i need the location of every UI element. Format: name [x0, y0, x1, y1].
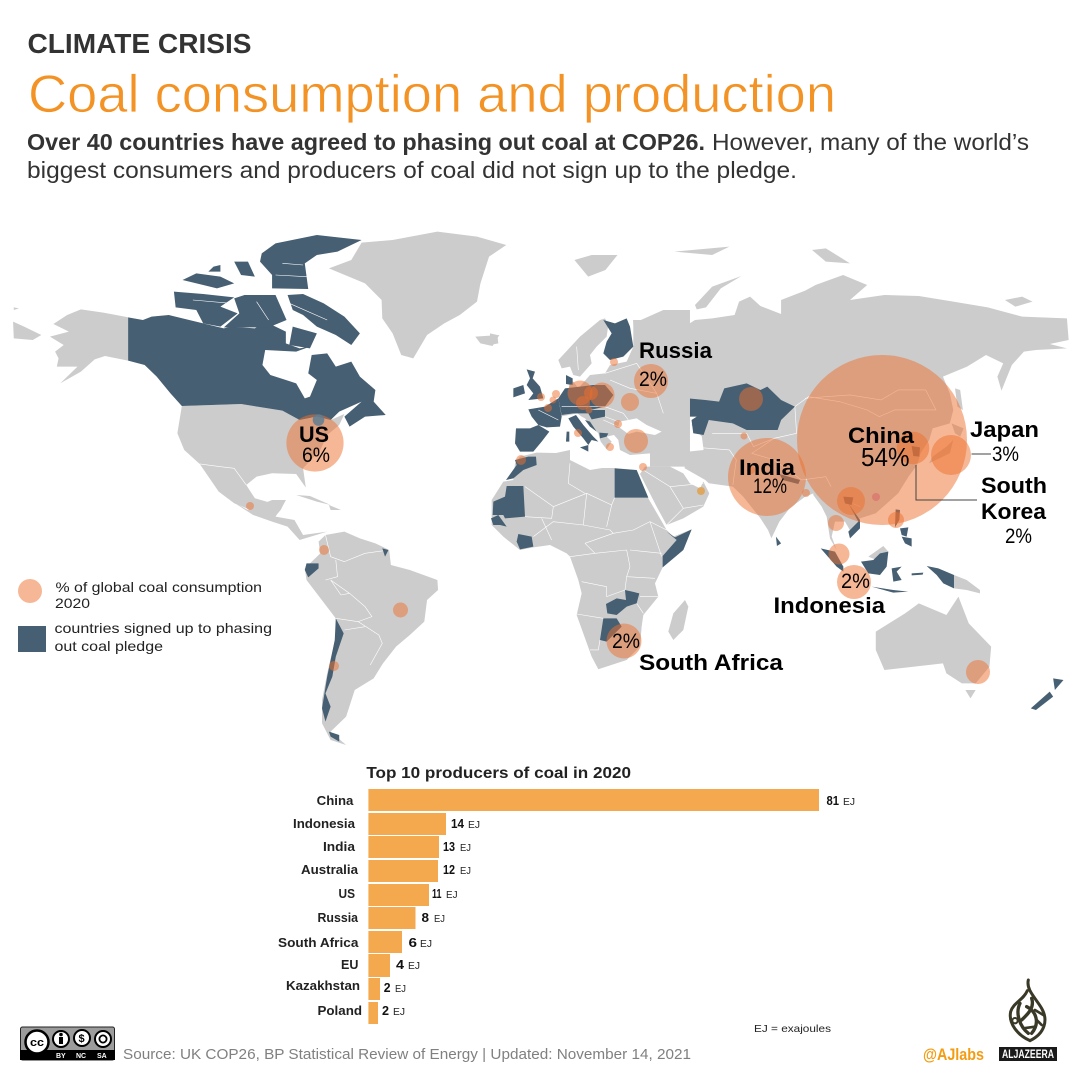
bar: US: 11 — [432, 887, 442, 901]
label: South Korea: 2% — [1005, 525, 1032, 548]
label: Japan: 3% — [992, 443, 1019, 466]
bar: Poland: EJ — [393, 1007, 405, 1018]
bar: US: EJ — [446, 890, 458, 901]
bubble: Turkey — [624, 429, 648, 453]
bubble: Germany — [568, 380, 592, 406]
label: China — [848, 423, 915, 472]
bar: Australia: Australia — [301, 863, 359, 877]
bubble: Morocco — [516, 455, 526, 465]
bar: EU: EU — [341, 958, 358, 972]
bar: India: 13 — [443, 840, 455, 854]
label: South Korea: South — [981, 473, 1047, 498]
bubble: Estonia — [610, 358, 618, 366]
intro text: Over 40 countries have agreed to phasing out coal at COP26. — [27, 129, 705, 155]
icon: creative commons badge — [20, 1027, 115, 1060]
bar: Indonesia — [293, 813, 480, 835]
bubble: Pakistan — [747, 466, 755, 474]
bubble: Ukraine — [621, 393, 639, 411]
intro text — [27, 129, 1029, 183]
label: South Korea — [916, 465, 1047, 548]
legend: pledge text: out coal pledge — [54, 638, 163, 654]
bubble: South Africa — [606, 624, 642, 658]
land: africa and arabia — [491, 450, 709, 669]
bar: India — [323, 836, 471, 858]
bubble: Uzbekistan — [740, 432, 748, 440]
legend: bubble text — [55, 579, 262, 611]
bar: Russia: 8 — [422, 911, 429, 925]
icon: Al Jazeera logo: ALJAZEERA — [1002, 1047, 1054, 1061]
label: Indonesia: 2% — [841, 570, 870, 593]
bubble: China — [797, 355, 967, 525]
label: China: 54% — [861, 442, 910, 472]
land: europe — [490, 310, 690, 467]
bubble: Belgium — [550, 396, 556, 404]
bar: Australia: EJ — [460, 866, 471, 877]
bubble: Italy — [574, 429, 582, 437]
bar: Indonesia: Indonesia — [293, 817, 356, 831]
bar: South Africa — [278, 931, 432, 953]
label: US — [299, 422, 330, 467]
icon: creative commons badge: cc — [30, 1037, 44, 1049]
bubble: Malaysia — [828, 544, 850, 564]
bar: US: US — [338, 887, 355, 901]
bubble: Israel — [639, 463, 647, 471]
kicker: climate crisis: CLIMATE CRISIS — [28, 28, 252, 59]
legend: pledge text — [54, 620, 272, 654]
bar chart: top 10 producers — [278, 765, 855, 1024]
label: Japan: Japan — [970, 417, 1039, 442]
label: China: China — [848, 423, 915, 448]
bar: Indonesia: 14 — [451, 817, 464, 831]
legend: pledge swatch — [18, 626, 46, 652]
bubble: Bulgaria — [614, 420, 622, 428]
label: South Africa: 2% — [612, 630, 640, 653]
bubble: Kazakhstan — [739, 387, 763, 411]
bubble: Philippines — [888, 512, 904, 528]
bubble: Hungary — [586, 406, 592, 414]
bubble: South Korea — [897, 432, 929, 464]
bar: South Africa: EJ — [420, 939, 432, 950]
bubble: Japan — [931, 435, 971, 475]
bubble: Indonesia — [837, 565, 871, 599]
bubble: Thailand — [828, 515, 844, 531]
bar: India: India — [323, 840, 356, 854]
bubble: UAE — [697, 487, 705, 495]
label: Indonesia: Indonesia — [774, 593, 886, 618]
unit note: EJ = exajoules — [754, 1023, 831, 1035]
coal consumption bubbles — [246, 355, 990, 684]
label: Russia: 2% — [639, 368, 667, 391]
bubble: Bangladesh — [802, 489, 810, 497]
bar: Russia — [318, 907, 445, 929]
bar: US — [338, 884, 458, 906]
label: Japan — [970, 417, 1039, 466]
icon: creative commons badge: NC — [76, 1053, 86, 1060]
bar: South Africa: South Africa — [278, 936, 360, 950]
bubble: Greece — [606, 443, 614, 451]
legend — [18, 579, 272, 654]
bar: Poland: Poland — [318, 1004, 362, 1018]
bar: Kazakhstan: Kazakhstan — [286, 979, 360, 993]
bubble: UK — [537, 393, 545, 401]
legend: bubble — [18, 579, 42, 603]
bar: Kazakhstan — [286, 978, 406, 1000]
intro text: However, many of the world’s — [712, 129, 1029, 155]
bar: Australia — [301, 860, 471, 882]
bubble: Colombia — [319, 545, 329, 555]
icon: creative commons badge: SA — [97, 1053, 107, 1060]
bar: Poland: 2 — [382, 1004, 389, 1018]
label: US: 6% — [302, 444, 330, 467]
label: India: 12% — [753, 475, 787, 498]
label: South Korea: Korea — [981, 499, 1047, 524]
land: southeast asia and oceania — [813, 446, 980, 593]
bar: India: EJ — [460, 843, 471, 854]
label: South Africa — [612, 630, 784, 675]
bar: Australia: 12 — [443, 863, 455, 877]
land: australia and new zealand — [776, 537, 1063, 710]
bubble: Vietnam — [837, 487, 865, 515]
bar: EU: 4 — [396, 958, 404, 972]
bubble: Canada — [313, 414, 324, 426]
bar: Indonesia: EJ — [468, 820, 480, 831]
label: India: India — [739, 455, 796, 480]
bubble: India — [728, 438, 806, 516]
bar: EU — [341, 954, 420, 977]
bubble: Czechia — [584, 386, 598, 400]
bar: EU: EJ — [408, 961, 420, 972]
bar: Kazakhstan: EJ — [395, 984, 406, 995]
bubble: Poland — [590, 382, 614, 408]
bubble: Netherlands — [552, 390, 560, 398]
label: India — [739, 455, 796, 498]
land: north america — [13, 232, 506, 520]
icon: creative commons badge: $ — [78, 1033, 85, 1045]
label: South Africa: South Africa — [639, 650, 784, 675]
chart heading: Top 10 producers of coal in 2020 — [366, 765, 631, 782]
legend: pledge text: countries signed up to phasing — [54, 620, 272, 636]
icon: Al Jazeera logo — [999, 980, 1057, 1061]
icon: creative commons badge: BY — [56, 1053, 66, 1060]
land: asia — [574, 247, 1069, 538]
label: US: US — [299, 422, 329, 447]
bar: South Africa: 6 — [408, 936, 417, 950]
bubble: Chile — [329, 661, 339, 671]
bubble: Taiwan — [872, 493, 880, 501]
bar: China: China — [317, 794, 354, 808]
bar: Kazakhstan: 2 — [384, 981, 391, 995]
bar: Russia: EJ — [434, 914, 445, 925]
bubble: Russia — [634, 364, 668, 398]
title: Coal consumption and production — [28, 65, 836, 124]
intro text: biggest consumers and producers of coal did not sign up to the pledge. — [27, 157, 797, 183]
land: south america — [232, 500, 438, 745]
bubble: France — [544, 404, 552, 412]
bubble: US — [286, 414, 344, 472]
handle: AJLabs: @AJlabs — [923, 1046, 984, 1064]
bar: Russia: Russia — [318, 911, 359, 925]
bar: China: EJ — [843, 797, 855, 808]
bar: China: 81 — [826, 794, 839, 808]
bubble: Mexico — [246, 502, 254, 510]
bubble: Austria — [576, 396, 590, 410]
legend: bubble text: 2020 — [55, 595, 90, 611]
bubble: Brazil — [393, 602, 408, 618]
label: Russia: Russia — [639, 338, 713, 363]
label: Russia — [639, 338, 713, 391]
bubble: Australia — [966, 660, 990, 684]
bar: China — [317, 789, 855, 811]
legend: bubble text: % of global coal consumption — [56, 579, 262, 595]
source line: Source: UK COP26, BP Statistical Review of Energy | Updated: November 14, 2021 — [123, 1046, 691, 1063]
label: Indonesia — [774, 570, 886, 618]
world map — [13, 232, 1069, 745]
bar: Poland — [318, 1002, 405, 1024]
